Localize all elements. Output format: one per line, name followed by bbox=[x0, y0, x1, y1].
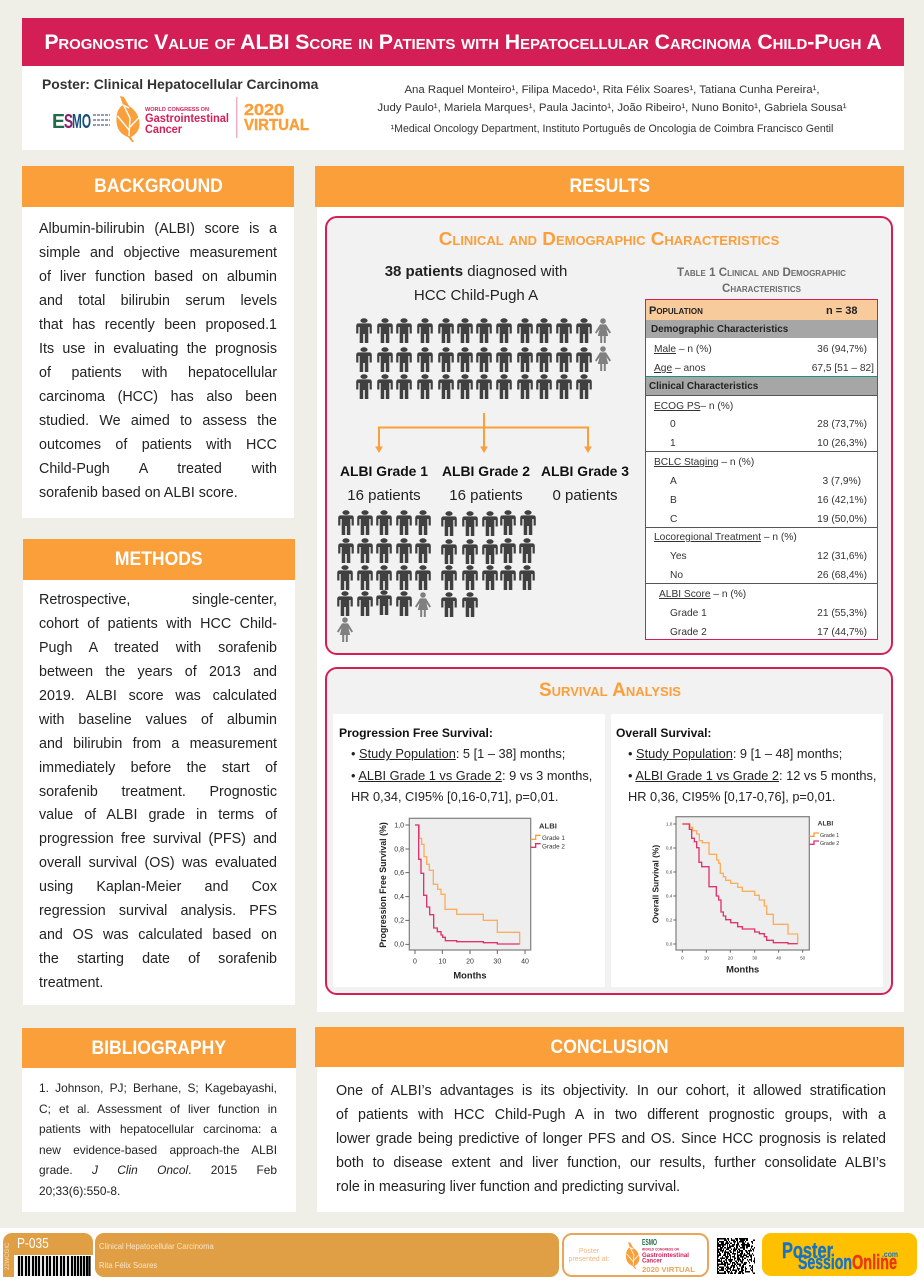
authors bbox=[377, 84, 847, 114]
table 1: characteristics: 28 (73,7%) bbox=[817, 419, 867, 430]
panel: methods bbox=[23, 539, 295, 1005]
methods text: 2019. ALBI score was calculated bbox=[39, 688, 277, 704]
background text: Child-Pugh A treated with bbox=[39, 461, 277, 477]
chart: OS Kaplan-Meier: Grade 2 bbox=[820, 841, 839, 847]
chart: OS Kaplan-Meier: 0,2 bbox=[666, 918, 673, 923]
chart: PFS Kaplan-Meier: Grade 2 bbox=[542, 843, 565, 850]
clinical heading: Clinical and Demographic Characteristics bbox=[439, 229, 779, 250]
table 1: characteristics: Yes bbox=[670, 551, 687, 562]
methods text: progression free survival (PFS) and bbox=[39, 831, 277, 847]
table 1: characteristics: Grade 2 bbox=[670, 627, 707, 638]
congress logo: E bbox=[52, 111, 65, 133]
conclusion text: role in measuring liver function and predicting survival. bbox=[336, 1179, 680, 1195]
table 1: characteristics: 17 (44,7%) bbox=[817, 627, 867, 638]
table 1: characteristics: Grade 1 bbox=[670, 608, 707, 619]
congress logo: Cancer bbox=[145, 122, 182, 136]
chart: PFS Kaplan-Meier: Grade 1 bbox=[542, 835, 565, 842]
panel: clinical and demographic characteristics bbox=[325, 216, 893, 655]
methods text: cohort of patients with HCC Child- bbox=[39, 616, 277, 632]
PosterSessionOnline logo bbox=[762, 1233, 917, 1276]
grade 1 label: 16 patients bbox=[347, 487, 421, 504]
patient count text: HCC Child-Pugh A bbox=[414, 287, 538, 304]
chart: PFS Kaplan-Meier: 20 bbox=[466, 959, 474, 966]
methods text: treatment. bbox=[39, 975, 103, 991]
affiliation: ¹Medical Oncology Department, Instituto Português de Oncologia de Coimbra Francisco Gentil bbox=[391, 123, 833, 135]
background text: of patients with hepatocellular bbox=[39, 365, 277, 381]
table 1: characteristics: 16 (42,1%) bbox=[817, 495, 867, 506]
table 1: characteristics bbox=[645, 299, 878, 640]
table 1: characteristics: 12 (31,6%) bbox=[817, 551, 867, 562]
icon: grade 2 pictogram bbox=[441, 510, 536, 617]
barcode bbox=[14, 1255, 93, 1277]
patient count text bbox=[385, 263, 567, 304]
background text: of liver function based on albumin bbox=[39, 269, 277, 285]
authors: Judy Paulo¹, Mariela Marques¹, Paula Jacinto¹, João Ribeiro¹, Nuno Bonito¹, Gabriela Sousa¹ bbox=[377, 102, 847, 114]
arrow: split into ALBI grades bbox=[375, 413, 592, 453]
icon: cohort pictogram bbox=[356, 318, 611, 399]
grade 3 label bbox=[541, 463, 629, 504]
chart: PFS Kaplan-Meier: 0,0 bbox=[394, 942, 404, 949]
chart: OS Kaplan-Meier: Overall Survival (%) bbox=[650, 845, 660, 923]
OS results text: • Study Population: 9 [1 – 48] months; bbox=[628, 746, 842, 761]
methods text: immediately before the start of bbox=[39, 760, 277, 776]
OS results text bbox=[628, 746, 876, 782]
footer strip bbox=[0, 1228, 924, 1280]
chart: OS Kaplan-Meier: Grade 1 bbox=[820, 833, 839, 839]
methods text: Retrospective, single-center, bbox=[39, 592, 277, 608]
chart: PFS Kaplan-Meier: 0,8 bbox=[394, 846, 404, 853]
panel: progression free survival bbox=[333, 714, 605, 987]
chart: PFS Kaplan-Meier: 0,6 bbox=[394, 870, 404, 877]
congress badge: ESMO bbox=[642, 1238, 657, 1247]
chart: PFS Kaplan-Meier: 0 bbox=[413, 959, 417, 966]
grade 2 label: ALBI Grade 2 bbox=[442, 463, 530, 479]
PFS results text bbox=[351, 746, 592, 782]
panel: bibliography bbox=[22, 1028, 296, 1212]
chart: OS Kaplan-Meier: 0,8 bbox=[666, 846, 673, 851]
background text: Albumin-bilirubin (ALBI) score is a bbox=[39, 221, 277, 237]
PFS results text: • ALBI Grade 1 vs Grade 2: 9 vs 3 months, bbox=[351, 768, 592, 782]
PosterSessionOnline logo: Poster bbox=[782, 1238, 833, 1263]
presenter: Rita Félix Soares bbox=[99, 1260, 157, 1270]
table 1: characteristics: 21 (55,3%) bbox=[817, 608, 867, 619]
survival heading: Survival Analysis bbox=[539, 680, 681, 701]
table 1: characteristics: B bbox=[670, 495, 677, 506]
background text: simple and objective measurement bbox=[39, 245, 277, 261]
conclusion text: both to disease extent and liver function, our results, further consolidate ALBI’s bbox=[336, 1155, 886, 1171]
grade 3 label: ALBI Grade 3 bbox=[541, 463, 629, 479]
chart: OS Kaplan-Meier: 10 bbox=[704, 956, 709, 961]
congress logo: Gastrointestinal bbox=[145, 111, 229, 125]
conclusion text: lower grade being predictive of longer PFS and OS. Since HCC prognosis is related bbox=[336, 1131, 886, 1147]
bibliography text: 20;33(6):550-8. bbox=[39, 1184, 120, 1198]
clinical section row: Clinical Characteristics bbox=[649, 381, 758, 392]
congress badge: Cancer bbox=[642, 1258, 662, 1264]
chart: OS Kaplan-Meier: 0,4 bbox=[666, 894, 673, 899]
icon: grade 1 pictogram bbox=[337, 510, 431, 642]
table 1: characteristics: 3 (7,9%) bbox=[822, 476, 861, 487]
table 1: characteristics: BCLC Staging – n (%) bbox=[654, 457, 754, 468]
congress badge: Poster bbox=[579, 1248, 600, 1255]
chart: PFS Kaplan-Meier: 30 bbox=[493, 959, 501, 966]
chart: OS Kaplan-Meier: 30 bbox=[752, 956, 758, 961]
poster topic bar bbox=[95, 1233, 559, 1277]
chart: PFS Kaplan-Meier: Progression Free Survival (%) bbox=[378, 822, 388, 948]
table caption bbox=[677, 266, 846, 295]
OS heading: Overall Survival: bbox=[616, 726, 711, 740]
conclusion heading bbox=[315, 1027, 904, 1067]
table 1: characteristics: ALBI Score – n (%) bbox=[659, 589, 746, 600]
grade 1 label bbox=[340, 463, 428, 504]
methods heading bbox=[23, 539, 295, 580]
table 1: characteristics: 10 (26,3%) bbox=[817, 438, 867, 449]
table header row bbox=[646, 300, 877, 320]
grade 2 label: 16 patients bbox=[449, 487, 523, 504]
PFS heading: Progression Free Survival: bbox=[339, 726, 493, 740]
background text: carcinoma (HCC) has also been bbox=[39, 389, 277, 405]
chart: PFS Kaplan-Meier: 0,2 bbox=[394, 918, 404, 925]
table 1: characteristics: Male – n (%) bbox=[654, 344, 712, 355]
chart: PFS Kaplan-Meier: 10 bbox=[438, 959, 446, 966]
chart: OS Kaplan-Meier: 50 bbox=[800, 956, 806, 961]
clinical section row bbox=[646, 377, 877, 395]
PosterSessionOnline logo: Online bbox=[852, 1252, 897, 1274]
table caption: Table 1 Clinical and Demographic bbox=[677, 266, 846, 279]
background heading bbox=[22, 166, 294, 207]
methods text: value of ALBI grade in terms of bbox=[39, 807, 277, 823]
chart: PFS Kaplan-Meier: 1,0 bbox=[394, 822, 404, 829]
table 1: characteristics: 19 (50,0%) bbox=[817, 514, 867, 525]
background text: Its use in evaluating the prognosis bbox=[39, 341, 277, 357]
chart: OS Kaplan-Meier: 1,0 bbox=[666, 822, 673, 827]
PosterSessionOnline logo: .com bbox=[882, 1250, 898, 1259]
chart: PFS Kaplan-Meier: Months bbox=[453, 970, 487, 980]
PosterSessionOnline logo: Session bbox=[798, 1252, 852, 1274]
methods text: sorafenib treatment. Prognostic bbox=[39, 784, 277, 800]
congress code: 22WCGIC bbox=[5, 1243, 11, 1270]
panel: conclusion bbox=[315, 1027, 904, 1195]
poster category: Poster: Clinical Hepatocellular Carcinoma bbox=[42, 76, 318, 92]
table 1: characteristics: 36 (94,7%) bbox=[817, 344, 867, 355]
chart: OS Kaplan-Meier: 0,0 bbox=[666, 942, 673, 947]
table 1: characteristics: Age – anos bbox=[654, 363, 706, 374]
methods text: with baseline values of albumin bbox=[39, 712, 277, 728]
conclusion heading: CONCLUSION bbox=[551, 1036, 668, 1058]
table 1: characteristics: 1 bbox=[670, 438, 676, 449]
congress badge: presented at: bbox=[569, 1256, 609, 1263]
grade 2 label bbox=[442, 463, 530, 504]
title banner: Prognostic Value of ALBI Score in Patients with Hepatocellular Carcinoma Child-Pugh A bbox=[44, 30, 882, 54]
poster number: P-035 bbox=[17, 1236, 49, 1252]
results heading bbox=[315, 166, 904, 207]
congress logo: 2020 bbox=[244, 102, 284, 119]
bibliography text: new evidence-based approach-the ALBI bbox=[39, 1143, 277, 1157]
panel: background bbox=[22, 166, 294, 518]
PFS results text: • Study Population: 5 [1 – 38] months; bbox=[351, 746, 565, 761]
header panel: congress and authors bbox=[22, 66, 904, 150]
congress logo bbox=[52, 96, 309, 142]
chart: OS Kaplan-Meier: 40 bbox=[776, 956, 782, 961]
congress badge: Gastrointestinal bbox=[642, 1252, 689, 1259]
panel: survival analysis bbox=[325, 667, 893, 995]
table 1: characteristics: No bbox=[670, 570, 683, 581]
methods text: between the years of 2013 and bbox=[39, 664, 277, 680]
table 1: characteristics: 67,5 [51 – 82] bbox=[812, 363, 874, 374]
congress badge: WORLD CONGRESS ON bbox=[642, 1246, 679, 1252]
patient count text: 38 patients diagnosed with bbox=[385, 263, 567, 280]
conclusion body bbox=[317, 1067, 904, 1212]
table 1: characteristics: Locoregional Treatment – n (%) bbox=[654, 532, 797, 543]
PFS hazard text: HR 0,34, CI95% [0,16-0,71], p=0,01. bbox=[351, 788, 558, 804]
chart: OS Kaplan-Meier bbox=[650, 816, 839, 974]
methods heading: METHODS bbox=[115, 548, 203, 570]
background text bbox=[39, 221, 277, 501]
methods text: using Kaplan-Meier and Cox bbox=[39, 879, 277, 895]
methods text: regression survival analysis. PFS bbox=[39, 903, 277, 919]
conclusion text: One of ALBI’s advantages is its objectivity. In our cohort, it allowed stratification bbox=[336, 1083, 886, 1099]
chart: OS Kaplan-Meier: 0,6 bbox=[666, 870, 673, 875]
table caption: Characteristics bbox=[722, 282, 801, 295]
background text: outcomes of patients with HCC bbox=[39, 437, 277, 453]
table 1: characteristics: A bbox=[670, 476, 677, 487]
bibliography text: grade. J Clin Oncol. 2015 Feb bbox=[39, 1163, 277, 1177]
table header row: Population bbox=[649, 305, 703, 317]
methods text: and OS was calculated based on bbox=[39, 927, 277, 943]
bibliography text: 1. Johnson, PJ; Berhane, S; Kagebayashi, bbox=[39, 1081, 277, 1095]
methods text: the starting date of sorafenib bbox=[39, 951, 277, 967]
congress logo: S bbox=[64, 111, 73, 133]
congress logo: WORLD CONGRESS ON bbox=[145, 107, 209, 113]
chart: PFS Kaplan-Meier: 0,4 bbox=[394, 894, 404, 901]
bibliography heading bbox=[22, 1028, 296, 1068]
chart: OS Kaplan-Meier: ALBI bbox=[818, 821, 833, 828]
demographic section row bbox=[646, 320, 877, 338]
table header row: n = 38 bbox=[826, 305, 858, 317]
grade 3 label: 0 patients bbox=[552, 487, 618, 504]
background text: sorafenib based on ALBI score. bbox=[39, 485, 238, 501]
background text: and total bilirubin serum levels bbox=[39, 293, 277, 309]
conclusion text: of patients with HCC Child-Pugh A in two different prognostic groups, with a bbox=[336, 1107, 886, 1123]
table 1: characteristics: 0 bbox=[670, 419, 676, 430]
congress logo: VIRTUAL bbox=[244, 117, 309, 134]
methods text bbox=[39, 592, 277, 991]
bibliography text: patients with hepatocellular carcinoma: a bbox=[39, 1122, 277, 1136]
methods text: overall survival (OS) was evaluated bbox=[39, 855, 277, 871]
table 1: characteristics: C bbox=[670, 514, 677, 525]
bibliography text: C; et al. Assessment of liver function in bbox=[39, 1102, 277, 1116]
panel: overall survival bbox=[611, 714, 883, 987]
chart: PFS Kaplan-Meier bbox=[378, 818, 565, 980]
chart: OS Kaplan-Meier: 20 bbox=[728, 956, 733, 961]
chart: OS Kaplan-Meier: Months bbox=[726, 964, 759, 974]
background text: studied. We aimed to assess the bbox=[39, 413, 277, 429]
results body bbox=[317, 207, 904, 1012]
results heading: RESULTS bbox=[569, 175, 650, 197]
QR code bbox=[717, 1238, 755, 1274]
table 1: characteristics: ECOG PS– n (%) bbox=[654, 401, 733, 412]
congress badge: 2020 VIRTUAL bbox=[642, 1265, 695, 1274]
bibliography heading: BIBLIOGRAPHY bbox=[92, 1037, 226, 1059]
OS results text: • ALBI Grade 1 vs Grade 2: 12 vs 5 months, bbox=[628, 768, 876, 782]
bibliography text bbox=[39, 1081, 277, 1198]
chart: OS Kaplan-Meier: 0 bbox=[681, 956, 684, 961]
poster id tab bbox=[3, 1233, 93, 1277]
congress badge bbox=[562, 1233, 709, 1277]
grade 1 label: ALBI Grade 1 bbox=[340, 463, 428, 479]
OS hazard text: HR 0,36, CI95% [0,17-0,76], p=0,01. bbox=[628, 788, 835, 804]
methods text: and bilirubin from a measurement bbox=[39, 736, 277, 752]
congress logo: MO bbox=[72, 111, 91, 133]
table 1: characteristics: 26 (68,4%) bbox=[817, 570, 867, 581]
topic: Clinical Hepatocellular Carcinoma bbox=[99, 1241, 214, 1251]
chart: PFS Kaplan-Meier: 40 bbox=[521, 959, 529, 966]
background heading: BACKGROUND bbox=[94, 175, 222, 197]
title banner bbox=[22, 18, 904, 66]
methods text: Pugh A treated with sorafenib bbox=[39, 640, 277, 656]
background text: that has recently been proposed.1 bbox=[39, 317, 277, 333]
demographic section row: Demographic Characteristics bbox=[651, 324, 788, 335]
authors: Ana Raquel Monteiro¹, Filipa Macedo¹, Rita Félix Soares¹, Tatiana Cunha Pereira¹, bbox=[404, 84, 820, 96]
conclusion text bbox=[336, 1083, 886, 1195]
chart: PFS Kaplan-Meier: ALBI bbox=[539, 821, 557, 830]
